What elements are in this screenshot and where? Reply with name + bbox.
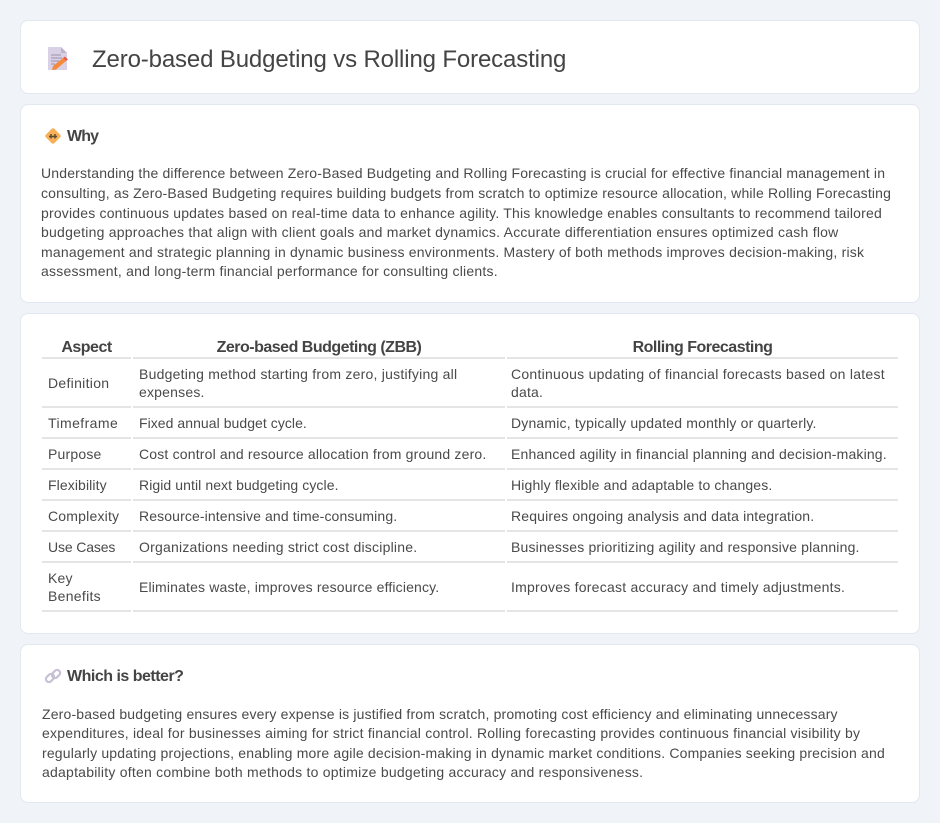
row: key benefits: Eliminates waste, improves resource efficiency.	[139, 579, 439, 595]
panel: which is better	[20, 644, 920, 803]
row: complexity	[48, 508, 814, 524]
row: purpose: Purpose	[48, 446, 102, 462]
row: complexity: Complexity	[48, 508, 119, 524]
row: purpose: Enhanced agility in financial planning and decision-making.	[511, 446, 887, 462]
row: timeframe	[48, 415, 817, 431]
row: complexity: Resource-intensive and time-consuming.	[139, 508, 397, 524]
icon: diamond sign	[45, 128, 61, 144]
row: definition: data.	[511, 384, 543, 400]
text block: why: Understanding the difference between Zero-Based Budgeting and Rolling Forecasting is crucial for effective financial management in	[41, 165, 885, 181]
row: timeframe: Dynamic, typically updated monthly or quarterly.	[511, 415, 817, 431]
row: timeframe: Fixed annual budget cycle.	[139, 415, 307, 431]
row: key benefits	[48, 570, 845, 604]
text block: why: management and strategic planning in dynamic business environments. Mastery of both methods improves decision-making, risk	[41, 244, 864, 260]
text block: which is better: Zero-based budgeting ensures every expense is justified from scratch, promoting cost efficiency and eliminating unnecessary	[42, 706, 838, 722]
row: complexity: Requires ongoing analysis and data integration.	[511, 508, 814, 524]
row: definition: expenses.	[139, 384, 205, 400]
text block: which is better: regularly updating projections, enabling more agile decision-making in dynamic market conditions. Companies seeking precision and	[42, 745, 885, 761]
table header: Aspect	[61, 339, 112, 356]
text block: which is better: adaptability often combine both methods to optimize budgeting accuracy and responsiveness.	[42, 764, 643, 780]
panel: why	[20, 104, 920, 303]
text block: which is better: expenditures, ideal for businesses aiming for strict financial control. Rolling forecasting provides continuous financial visibility by	[42, 725, 860, 741]
row: purpose	[48, 446, 887, 462]
table header	[61, 339, 772, 356]
header panel	[20, 20, 920, 94]
table header: Rolling Forecasting	[633, 339, 772, 356]
icon: document with pencil	[48, 47, 68, 70]
table header: Zero-based Budgeting (ZBB)	[217, 339, 421, 356]
row: flexibility: Rigid until next budgeting cycle.	[139, 477, 339, 493]
text block: why: assessment, and long-term financial performance for consulting clients.	[41, 263, 498, 279]
row: key benefits: Benefits	[48, 588, 101, 604]
row: flexibility	[48, 477, 772, 493]
text block: why	[41, 165, 891, 279]
row: use cases	[48, 539, 860, 555]
row: definition	[48, 366, 885, 400]
text block: why: budgeting approaches that align with client goals and market dynamics. Accurate differentiation ensures optimized cash flow	[41, 224, 839, 240]
row: key benefits: Improves forecast accuracy and timely adjustments.	[511, 579, 845, 595]
row: definition: Budgeting method starting from zero, justifying all	[139, 366, 457, 382]
row: use cases: Organizations needing strict cost discipline.	[139, 539, 417, 555]
row: flexibility: Highly flexible and adaptable to changes.	[511, 477, 772, 493]
heading: which is better: Which is better?	[67, 668, 183, 685]
text block: which is better	[42, 706, 885, 780]
row: flexibility: Flexibility	[48, 477, 107, 493]
row: use cases: Businesses prioritizing agility and responsive planning.	[511, 539, 860, 555]
row: definition: Definition	[48, 375, 109, 391]
heading: why: Why	[67, 128, 98, 145]
panel: comparison table	[20, 313, 920, 634]
row: key benefits: Key	[48, 570, 73, 586]
text block: why: provides continuous updates based on real-time data to enhance agility. This knowledge enables consultants to recommend tailored	[41, 205, 882, 221]
row: use cases: Use Cases	[48, 539, 115, 555]
row: purpose: Cost control and resource allocation from ground zero.	[139, 446, 486, 462]
icon: chain link	[44, 668, 62, 684]
row: timeframe: Timeframe	[48, 415, 118, 431]
text block: why: consulting, as Zero-Based Budgeting requires building budgets from scratch to optimize resource allocation, while Rolling Forecasting	[41, 185, 891, 201]
title: Zero-based Budgeting vs Rolling Forecasting	[92, 46, 566, 73]
row: definition: Continuous updating of financial forecasts based on latest	[511, 366, 885, 382]
